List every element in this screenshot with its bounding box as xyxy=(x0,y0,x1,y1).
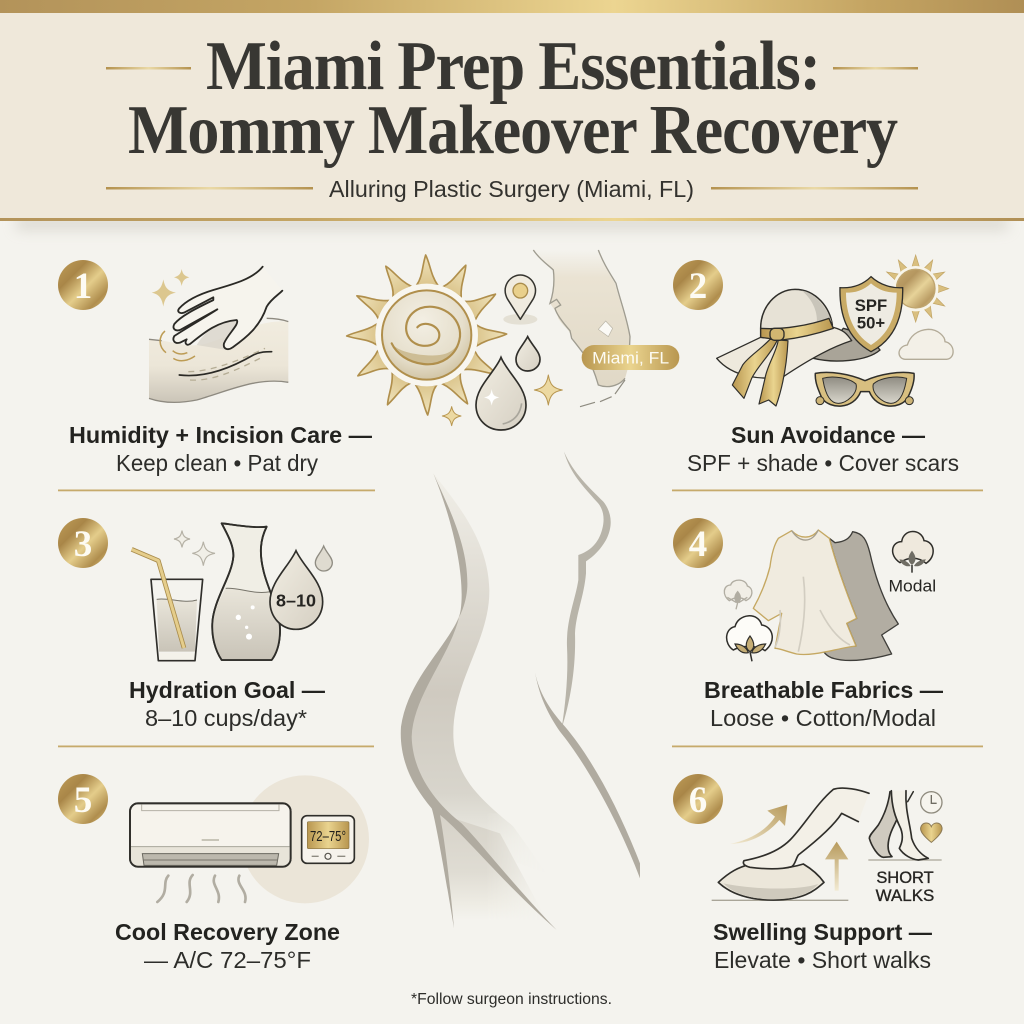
large drop with 8-10 label xyxy=(270,551,323,629)
badge 5 xyxy=(58,774,108,824)
header banner xyxy=(0,0,1024,230)
badge 4: 4 xyxy=(689,524,707,565)
badge 2 xyxy=(673,260,723,310)
text 3: 8–10 cups/day* xyxy=(145,705,307,731)
water drops xyxy=(476,337,540,430)
glass xyxy=(132,549,203,661)
badge 1 xyxy=(58,260,108,310)
title: Miami Prep Essentials: xyxy=(206,28,820,105)
sunglasses xyxy=(815,372,914,406)
short walks label xyxy=(876,868,934,905)
map pin xyxy=(503,275,537,325)
Miami label: Miami, FL xyxy=(592,349,669,368)
faded cotton xyxy=(724,580,752,609)
elevated leg xyxy=(743,788,869,869)
Florida map xyxy=(533,250,679,407)
heading 4: Breathable Fabrics — xyxy=(704,677,943,703)
thermostat: 72–75° xyxy=(310,829,346,845)
badge 2: 2 xyxy=(689,266,707,307)
badge 6 xyxy=(673,774,723,824)
heading 6: Swelling Support — xyxy=(713,919,932,945)
Modal label: Modal xyxy=(888,576,936,595)
clock xyxy=(921,792,942,813)
heart xyxy=(921,823,942,842)
cotton boll xyxy=(727,616,772,661)
panel 1: humidity and incision care xyxy=(58,260,372,476)
icon: hand patting incision xyxy=(149,267,288,402)
heading 1: Humidity + Incision Care — xyxy=(69,422,372,448)
text 5: — A/C 72–75°F xyxy=(144,947,311,973)
subtitle: Alluring Plastic Surgery (Miami, FL) xyxy=(329,176,694,202)
panel 4: breathable fabrics xyxy=(673,518,943,731)
large drop with 8-10 label: 8–10 xyxy=(276,591,316,611)
heading 5: Cool Recovery Zone xyxy=(115,919,340,945)
heading 3: Hydration Goal — xyxy=(129,677,325,703)
cool air waves xyxy=(157,875,246,902)
sun xyxy=(347,255,507,415)
short walks label: WALKS xyxy=(876,886,934,905)
badge 1: 1 xyxy=(74,266,92,307)
panel 3: hydration goal xyxy=(58,518,332,731)
air conditioner xyxy=(130,803,291,867)
panel 5: cool recovery zone xyxy=(58,774,369,973)
small drop xyxy=(315,546,332,571)
walking legs xyxy=(868,791,942,860)
panel 2: sun avoidance xyxy=(673,255,959,476)
modal garment xyxy=(820,532,898,660)
text 2: SPF + shade • Cover scars xyxy=(687,450,959,476)
icon: air conditioner and thermostat xyxy=(130,775,369,903)
cotton plant top right xyxy=(893,532,933,573)
icon: elevated leg, pillow and short walks xyxy=(712,788,942,905)
arrows xyxy=(730,805,848,891)
text 6: Elevate • Short walks xyxy=(714,947,931,973)
cotton garment xyxy=(753,530,857,655)
pillow xyxy=(718,864,824,900)
badge 6: 6 xyxy=(689,780,707,821)
icon: garments and cotton xyxy=(724,530,936,661)
sparkles xyxy=(174,531,215,566)
badge 3 xyxy=(58,518,108,568)
heading 2: Sun Avoidance — xyxy=(731,422,925,448)
hat xyxy=(717,289,880,406)
central body silhouette xyxy=(401,452,640,930)
sparkles xyxy=(442,375,562,426)
footnote: *Follow surgeon instructions. xyxy=(411,991,612,1008)
title: Mommy Makeover Recovery xyxy=(128,92,898,169)
badge 5: 5 xyxy=(74,780,92,821)
icon: sun hat, shield, sun, cloud and sunglasses xyxy=(717,255,953,406)
SPF shield: 50+ xyxy=(857,314,885,333)
badge 4 xyxy=(673,518,723,568)
panel 6: swelling support xyxy=(673,774,942,973)
SPF shield xyxy=(840,277,903,352)
cloud xyxy=(899,329,953,359)
text 4: Loose • Cotton/Modal xyxy=(710,705,936,731)
title xyxy=(128,28,898,169)
thermostat xyxy=(302,816,354,863)
carafe xyxy=(212,523,280,660)
central illustration: sun, pin, drops and Florida map xyxy=(347,250,679,430)
badge 3: 3 xyxy=(74,524,92,565)
Miami label xyxy=(582,345,679,370)
short walks label: SHORT xyxy=(876,868,934,887)
SPF shield: SPF xyxy=(855,296,887,315)
text 1: Keep clean • Pat dry xyxy=(116,450,318,476)
small sun xyxy=(887,255,949,322)
icon: glass, carafe and drop xyxy=(132,523,332,661)
